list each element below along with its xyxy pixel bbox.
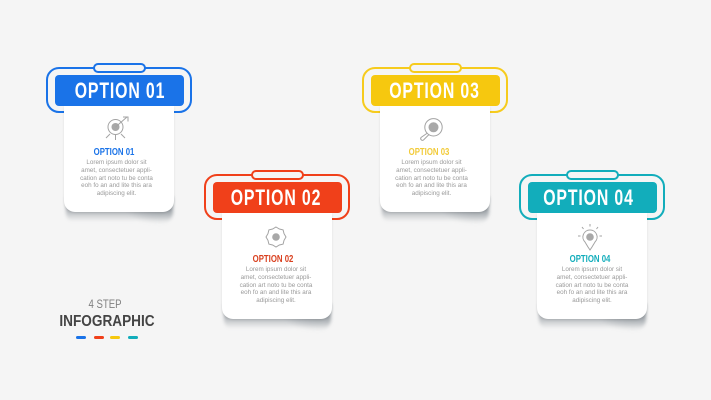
body text: Lorem ipsum dolor sit bbox=[246, 266, 306, 273]
body text: Lorem ipsum dolor sit bbox=[401, 159, 462, 166]
card shadow bbox=[224, 304, 331, 331]
body text: adipiscing elit. bbox=[97, 190, 136, 197]
body card bbox=[64, 106, 174, 212]
icon: gear bbox=[266, 226, 286, 248]
body text: Lorem ipsum dolor sit bbox=[86, 159, 147, 166]
body text: Lorem ipsum dolor sit bbox=[562, 266, 622, 273]
body text bbox=[556, 266, 628, 304]
body text: adipiscing elit. bbox=[412, 190, 451, 197]
body text: eoh fo an and lite this ara bbox=[557, 289, 627, 296]
header pill bbox=[251, 170, 304, 180]
header banner bbox=[213, 182, 342, 213]
body text: amet, consectetuer appli- bbox=[241, 274, 311, 281]
header banner bbox=[528, 182, 657, 213]
title: infographic: INFOGRAPHIC bbox=[59, 313, 155, 330]
heading: OPTION 01 bbox=[94, 146, 134, 158]
body text: cation art noto tu be conta bbox=[80, 175, 153, 182]
panel: option 01 bbox=[46, 63, 192, 222]
header outline bbox=[46, 67, 192, 113]
body text: eoh fo an and lite this ara bbox=[241, 289, 311, 296]
body text: amet, consectetuer appli- bbox=[396, 167, 467, 174]
header outline bbox=[204, 174, 350, 220]
heading: OPTION 02 bbox=[253, 254, 293, 264]
banner label: OPTION 04 bbox=[543, 185, 634, 210]
body card bbox=[380, 106, 490, 212]
header pill bbox=[566, 170, 619, 180]
header pill bbox=[93, 63, 146, 73]
heading: OPTION 04 bbox=[570, 254, 610, 264]
icon: light bulb bbox=[578, 224, 602, 251]
body text: cation art noto tu be conta bbox=[556, 282, 628, 289]
icon: target bbox=[106, 116, 128, 140]
body text bbox=[240, 266, 312, 304]
body text: amet, consectetuer appli- bbox=[557, 274, 627, 281]
body text: cation art noto tu be conta bbox=[240, 282, 312, 289]
banner label: OPTION 03 bbox=[389, 78, 480, 103]
body card bbox=[537, 213, 647, 319]
body text: cation art noto tu be conta bbox=[395, 175, 468, 182]
body text: eoh fo an and lite this ara bbox=[396, 182, 467, 189]
heading: OPTION 03 bbox=[409, 146, 449, 158]
header banner bbox=[55, 75, 184, 106]
body card bbox=[222, 213, 332, 319]
panel: option 03 bbox=[362, 63, 508, 222]
card shadow bbox=[66, 197, 173, 224]
header outline bbox=[362, 67, 508, 113]
card shadow bbox=[539, 304, 646, 331]
legend dashes bbox=[76, 336, 138, 339]
banner label: OPTION 02 bbox=[231, 185, 321, 210]
icon: magnifier bbox=[420, 118, 443, 141]
body text bbox=[80, 159, 153, 197]
title: 4 step: 4 STEP bbox=[88, 297, 122, 311]
body text: amet, consectetuer appli- bbox=[81, 167, 152, 174]
body text: adipiscing elit. bbox=[572, 297, 612, 304]
panel: option 02 bbox=[204, 170, 350, 330]
header outline bbox=[519, 174, 665, 220]
card shadow bbox=[382, 197, 489, 224]
body text: eoh fo an and lite this ara bbox=[81, 182, 152, 189]
body text bbox=[395, 159, 468, 197]
body text: adipiscing elit. bbox=[256, 297, 296, 304]
header pill bbox=[409, 63, 462, 73]
panel: option 04 bbox=[519, 170, 665, 330]
banner label: OPTION 01 bbox=[75, 78, 165, 103]
header banner bbox=[371, 75, 500, 106]
